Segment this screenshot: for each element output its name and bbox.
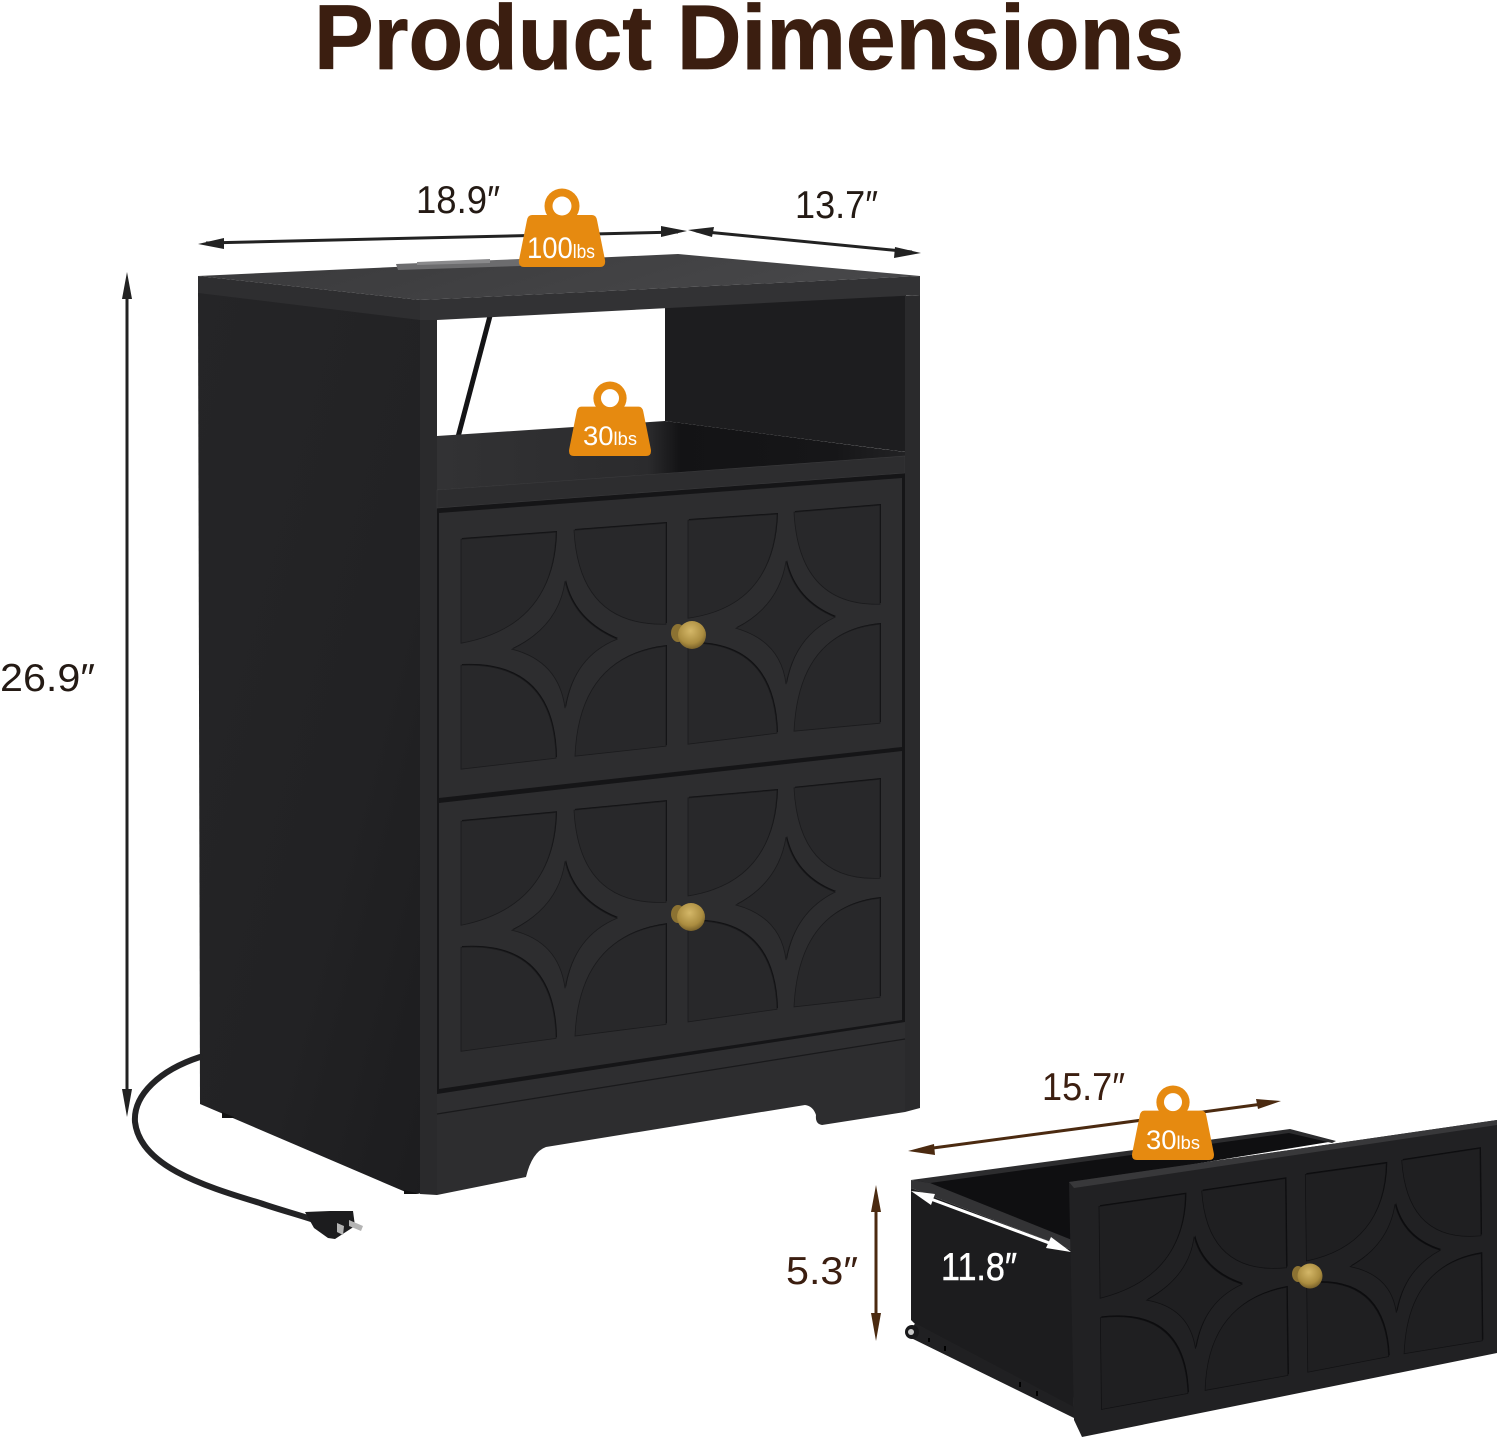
base rail	[437, 1022, 905, 1114]
left side panel	[198, 290, 437, 1194]
table top front edge	[420, 276, 920, 320]
right cubby interior	[665, 294, 906, 452]
arrow: drawer depth 11.8 (white)	[911, 1191, 1071, 1252]
nightstand cabinet	[198, 254, 920, 1195]
knob upper	[671, 621, 706, 649]
drawer knob	[1292, 1264, 1322, 1288]
arrow: depth 13.7	[688, 227, 921, 258]
open drawer	[905, 1120, 1497, 1437]
table top surface	[198, 254, 920, 300]
small feet	[222, 1112, 420, 1194]
right side stile	[905, 295, 920, 1112]
drawer side rim	[911, 1180, 1072, 1250]
upper drawer	[439, 478, 902, 798]
label: drawer width: 15.7″	[1042, 1066, 1125, 1109]
arrow: width 18.9	[198, 226, 687, 249]
arrow: drawer width 15.7	[908, 1099, 1281, 1155]
knob lower	[671, 903, 705, 931]
opening back white area with power cord	[437, 307, 665, 437]
label: depth: 13.7″	[795, 184, 878, 227]
weight badge: shelf 30lbs: 30lbs	[583, 421, 637, 451]
charging station strip	[396, 259, 520, 270]
drawer side wall	[911, 1188, 1074, 1410]
arrow: height 26.9	[122, 272, 132, 1117]
base plinth	[437, 1039, 905, 1195]
drawer front	[1069, 1120, 1497, 1437]
label: width: 18.9″	[416, 179, 500, 222]
cabinet front backing	[437, 455, 906, 1114]
label: height: 26.9″	[0, 657, 95, 700]
drawer back rim	[911, 1129, 1336, 1183]
table top left edge	[198, 276, 420, 320]
label: drawer depth: 11.8″	[941, 1246, 1017, 1289]
weight badge: drawer 30lbs: 30lbs	[1146, 1125, 1200, 1155]
shelf surface	[437, 421, 905, 490]
drawer front pattern	[1099, 1147, 1484, 1409]
weight badge: shelf 30lbs	[569, 381, 651, 456]
weight badge: top 100lbs: 100lbs	[527, 232, 595, 265]
lower drawer	[439, 751, 902, 1089]
weight badge: top 100lbs	[519, 188, 605, 267]
arrow: drawer height 5.3	[871, 1185, 881, 1341]
drawer interior	[911, 1130, 1335, 1244]
front stile	[420, 318, 437, 1195]
weight badge: drawer 30lbs	[1132, 1085, 1214, 1160]
shelf front edge	[437, 456, 905, 508]
drawer slide rail	[905, 1323, 1074, 1418]
power cord and plug	[135, 1057, 363, 1239]
label: drawer height: 5.3″	[786, 1250, 858, 1293]
